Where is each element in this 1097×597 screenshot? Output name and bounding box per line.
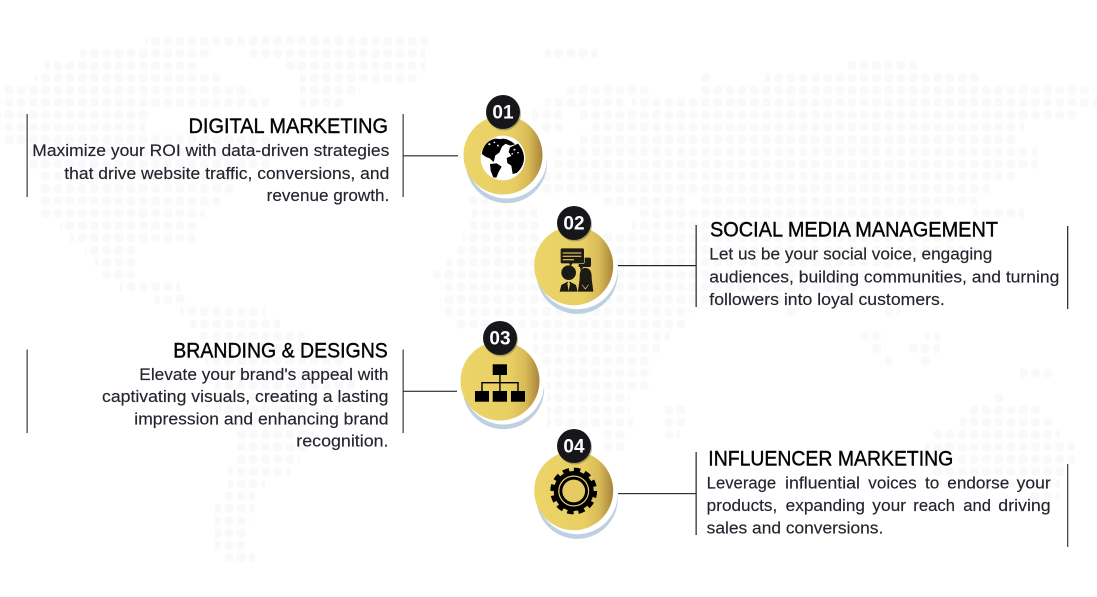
panel: influencer marketing [534, 429, 1068, 547]
heading: branding and designs: BRANDING & DESIGNS [173, 339, 388, 362]
text block: influencer marketing: reach [913, 497, 955, 515]
icon: organisation chart [475, 364, 525, 402]
text block: influencer marketing: to [925, 474, 939, 492]
text block: branding and designs: Elevate your brand's appeal with [139, 366, 388, 384]
text block: influencer marketing: and [963, 497, 991, 515]
text block: influencer marketing: voices [868, 474, 917, 492]
bracket: digital marketing right bar [402, 114, 404, 197]
text block: influencer marketing: driving [998, 497, 1051, 515]
text block: branding and designs: captivating visuals, creating a lasting [102, 388, 388, 406]
icon disc: 04 gear [534, 429, 618, 539]
text block: influencer marketing: expanding [786, 497, 865, 515]
panel: branding and designs [26, 321, 544, 451]
bracket: social media right bar [1067, 226, 1068, 309]
text block: influencer marketing: your [1017, 474, 1051, 492]
text block: branding and designs: recognition. [296, 433, 388, 451]
number badge: 04: 04 [563, 436, 585, 458]
number badge: 01: 01 [492, 102, 514, 124]
connector: branding [403, 391, 457, 392]
text block: social media management [709, 245, 1059, 309]
text block: influencer marketing [707, 474, 1051, 537]
text block: digital marketing: that drive website traffic, conversions, and [64, 165, 389, 183]
text block: digital marketing: revenue growth. [267, 187, 389, 205]
number badge: 02: 02 [563, 214, 585, 234]
text block: social media management: audiences, building communities, and turning [709, 268, 1059, 286]
number badge: 03: 03 [489, 328, 511, 350]
text block: influencer marketing: your [872, 497, 907, 515]
text block: social media management: Let us be your social voice, engaging [709, 245, 992, 263]
bracket: branding left bar [26, 350, 28, 433]
heading: social media management: SOCIAL MEDIA MANAGEMENT [710, 219, 998, 242]
heading: digital marketing: DIGITAL MARKETING [188, 115, 388, 138]
text block: influencer marketing: sales and conversions. [707, 519, 883, 537]
connector: social media [618, 265, 696, 266]
icon: globe [481, 136, 525, 180]
connector: influencer [618, 493, 696, 494]
bracket: influencer right bar [1067, 464, 1068, 547]
panel: digital marketing [26, 95, 547, 205]
icon: gear [552, 470, 595, 512]
connector: digital marketing [403, 155, 458, 156]
bracket: social media left bar [696, 225, 697, 307]
bracket: branding right bar [402, 350, 404, 433]
icon disc: 03 hierarchy [460, 321, 544, 429]
icon disc: 01 globe [464, 95, 547, 203]
icon disc: 02 speech and people [534, 206, 618, 314]
text block: influencer marketing: endorse [947, 474, 1009, 492]
text block: social media management: followers into loyal customers. [709, 291, 945, 309]
text block: influencer marketing: Leverage [707, 474, 776, 492]
text block: branding and designs [102, 366, 388, 451]
text block: digital marketing [32, 142, 389, 205]
text block: influencer marketing: influential [785, 474, 860, 492]
bracket: influencer left bar [696, 452, 697, 535]
heading: influencer marketing: INFLUENCER MARKETING [708, 448, 953, 471]
text block: digital marketing: Maximize your ROI with data-driven strategies [32, 142, 389, 160]
bracket: digital marketing left bar [26, 114, 28, 197]
panel: social media management [534, 206, 1068, 314]
text block: branding and designs: impression and enhancing brand [134, 411, 388, 429]
text block: influencer marketing: products, [707, 497, 777, 515]
icon: speech bubbles and two people [560, 248, 593, 292]
